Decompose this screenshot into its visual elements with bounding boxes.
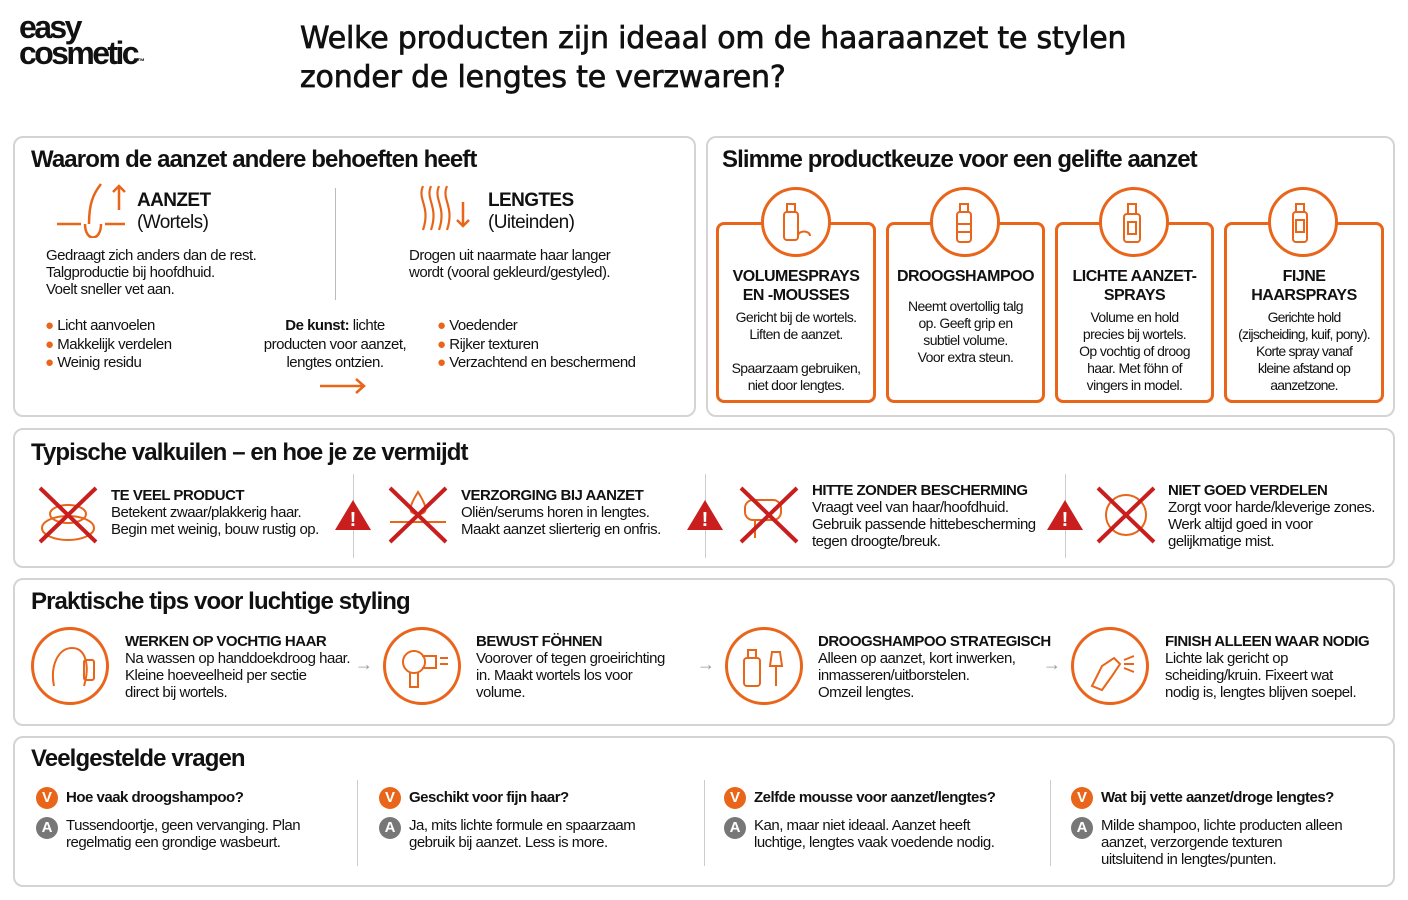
faq items: Wat bij vette aanzet/droge lengtes? [1101,789,1334,806]
pitfalls items: ! [702,509,708,531]
arrow [320,378,366,394]
tips items: scheiding/kruin. Fixeert wat [1165,667,1333,684]
tips items: Alleen op aanzet, kort inwerken, [818,650,1015,667]
heading: Slimme productkeuze voor een gelifte aanzet [722,146,1197,173]
card: haarsprays: aanzetzone. [1270,377,1338,393]
faq items: V [730,789,740,806]
title [300,21,1126,95]
faq items: gebruik bij aanzet. Less is more. [409,834,608,851]
list right [437,317,636,371]
center text: De kunst: lichte [285,317,385,334]
panel: tips [13,578,1395,726]
card: volumesprays [716,222,876,403]
faq items: Milde shampoo, lichte producten alleen [1101,817,1342,834]
tips items [31,627,1369,705]
card: volumesprays: Liften de aanzet. [749,326,843,342]
center text [264,317,406,371]
list right: ● Voedender [437,317,517,334]
pitfalls items [38,474,1375,558]
tips items: DROOGSHAMPOO STRATEGISCH [818,633,1051,650]
tips items: volume. [476,684,525,701]
tips items: FINISH ALLEEN WAAR NODIG [1165,633,1369,650]
faq items: regelmatig een grondige wasbeurt. [66,834,280,851]
card: haarsprays: FIJNE [1283,268,1325,285]
pitfalls items: gelijkmatige mist. [1168,533,1274,550]
tips items: → [1043,654,1061,674]
card: haarsprays: Gerichte hold [1268,309,1340,325]
text: aanzet: (Wortels) [137,212,208,233]
card: droogshampoo [886,222,1045,403]
card: volumesprays: EN -MOUSSES [743,287,849,304]
panel: products [706,136,1395,417]
faq items: A [42,819,52,836]
card: haarsprays [1224,222,1384,403]
tips items: → [697,654,715,674]
logo: easy [19,9,80,45]
text: aanzet [137,190,211,233]
tips items: Omzeil lengtes. [818,684,914,701]
faq items: Geschikt voor fijn haar? [409,789,569,806]
heading: Praktische tips voor luchtige styling [31,588,410,615]
heading: Waarom de aanzet andere behoeften heeft [31,146,476,173]
faq items: Tussendoortje, geen vervanging. Plan [66,817,300,834]
card: volumesprays: Gericht bij de wortels. [736,309,856,325]
card: volumesprays: VOLUMESPRAYS [733,268,859,285]
card: droogshampoo: Neemt overtollig talg [908,298,1023,314]
pitfalls items: ! [1062,509,1068,531]
panel: why: Voelt sneller vet aan. [46,281,174,298]
card: lichte sprays: precies bij wortels. [1083,326,1186,342]
faq items: luchtige, lengtes vaak voedende nodig. [754,834,994,851]
faq items: V [1077,789,1087,806]
list left: ● Makkelijk verdelen [45,336,172,352]
card: lichte sprays [1055,222,1214,403]
icon: lengths [420,186,470,230]
tips items: in. Maakt wortels los voor [476,667,632,684]
faq items: V [385,789,395,806]
pitfalls items: ! [350,509,356,531]
faq items: V [42,789,52,806]
card: haarsprays: (zijscheiding, kuif, pony). [1238,326,1370,342]
pitfalls items: Oliën/serums horen in lengtes. [461,504,649,521]
heading: Typische valkuilen – en hoe je ze vermijdt [31,439,468,466]
card: haarsprays: Korte spray vanaf [1256,343,1352,359]
tips items: Kleine hoeveelheid per sectie [125,667,306,684]
faq items: A [730,819,740,836]
center text: producten voor aanzet, [264,336,406,352]
card: droogshampoo: subtiel volume. [923,332,1008,348]
panel: faq [13,736,1395,887]
tips items: → [355,654,373,674]
logo: cosmetic™ [19,35,145,71]
faq items: Kan, maar niet ideaal. Aanzet heeft [754,817,970,834]
card: volumesprays: Spaarzaam gebruiken, [732,360,860,376]
card: lichte sprays: haar. Met föhn of [1087,360,1182,376]
faq items: A [385,819,395,836]
tips items: BEWUST FÖHNEN [476,633,602,650]
card: lichte sprays: SPRAYS [1104,287,1165,304]
title: Welke producten zijn ideaal om de haaraanzet te stylen [300,21,1126,56]
pitfalls items: Gebruik passende hittebescherming [812,516,1036,533]
pitfalls items: VERZORGING BIJ AANZET [461,487,643,504]
faq items: aanzet, verzorgende texturen [1101,834,1282,851]
pitfalls items: Maakt aanzet slierterig en onfris. [461,521,661,538]
pitfalls items: Begin met weinig, bouw rustig op. [111,521,319,538]
panel: why [13,136,696,417]
pitfalls items: tegen droogte/breuk. [812,533,940,550]
faq items: A [1077,819,1087,836]
tips items: WERKEN OP VOCHTIG HAAR [125,633,326,650]
tips items: Voorover of tegen groeirichting [476,650,665,667]
card: volumesprays: niet door lengtes. [748,377,844,393]
card: lichte sprays: vingers in model. [1087,377,1182,393]
tips items: nodig is, lengtes blijven soepel. [1165,684,1356,701]
panel: why: Drogen uit naarmate haar langer [409,247,610,264]
faq items: Zelfde mousse voor aanzet/lengtes? [754,789,995,806]
faq items: Ja, mits lichte formule en spaarzaam [409,817,635,834]
card: droogshampoo: DROOGSHAMPOO [897,268,1034,285]
pitfalls items: Betekent zwaar/plakkerig haar. [111,504,301,521]
card: lichte sprays: LICHTE AANZET- [1073,268,1196,285]
card: haarsprays: HAARSPRAYS [1251,287,1357,304]
tips items: Na wassen op handdoekdroog haar. [125,650,350,667]
list left [45,317,172,371]
card: lichte sprays: Op vochtig of droog [1079,343,1190,359]
faq items: uitsluitend in lengtes/punten. [1101,851,1276,868]
text: aanzet: AANZET [137,190,210,211]
center text: lengtes ontzien. [286,354,384,371]
list right: ● Rijker texturen [437,336,538,352]
faq items [36,780,1342,868]
panel: why: wordt (vooral gekleurd/gestyled). [409,264,610,281]
logo [19,9,145,71]
card: lichte sprays: Volume en hold [1090,309,1179,325]
text: lengtes: LENGTES [488,190,574,211]
card: haarsprays: kleine afstand op [1258,360,1350,376]
pitfalls items: HITTE ZONDER BESCHERMING [812,482,1028,499]
panel: why: Talgproductie bij hoofdhuid. [46,264,215,281]
icons: product circles [761,187,1338,257]
faq items: Hoe vaak droogshampoo? [66,789,243,806]
tips items: Lichte lak gericht op [1165,650,1288,667]
title: zonder de lengtes te verzwaren? [300,60,786,95]
pitfalls items: TE VEEL PRODUCT [111,487,244,504]
tips items: direct bij wortels. [125,684,227,701]
pitfalls items: Zorgt voor harde/kleverige zones. [1168,499,1375,516]
list left: ● Licht aanvoelen [45,317,155,334]
icon: root [57,183,126,238]
card: droogshampoo: Voor extra steun. [918,349,1013,365]
panel: why: Gedraagt zich anders dan de rest. [46,247,256,264]
text: lengtes [488,190,574,233]
tips items: inmasseren/uitborstelen. [818,667,969,684]
panel: pitfalls [13,428,1395,568]
card: droogshampoo: op. Geeft grip en [918,315,1013,331]
pitfalls items: NIET GOED VERDELEN [1168,482,1327,499]
list right: ● Verzachtend en beschermend [437,354,636,371]
pitfalls items: Vraagt veel van haar/hoofdhuid. [812,499,1009,516]
text: lengtes: (Uiteinden) [488,212,574,233]
pitfalls items: Werk altijd goed in voor [1168,516,1312,533]
list left: ● Weinig residu [45,354,141,371]
heading: Veelgestelde vragen [31,745,245,772]
